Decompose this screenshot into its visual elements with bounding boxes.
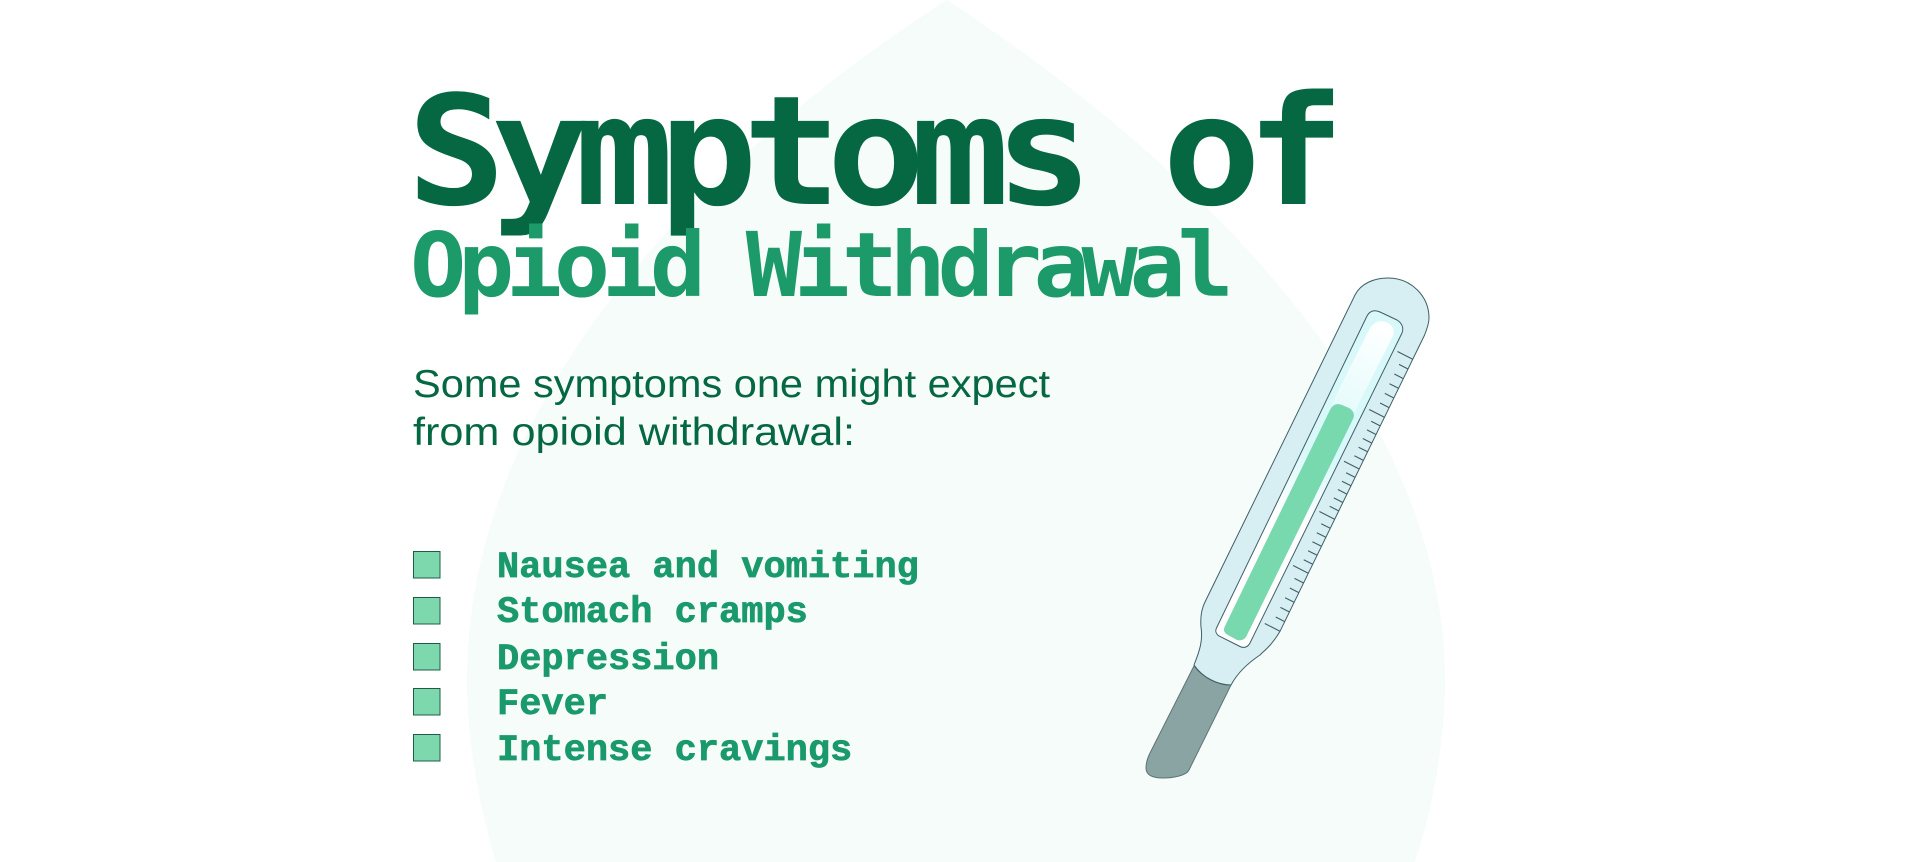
thermometer body (1194, 278, 1429, 685)
thermometer green fill level (1224, 404, 1354, 640)
title line 1: Symptoms of (407, 64, 1333, 241)
list item: intense cravings: Intense cravings (497, 730, 852, 772)
intro line 2: from opioid withdrawal: (413, 411, 855, 454)
background droplet shape (467, 0, 1445, 862)
intro paragraph (413, 363, 1050, 454)
symptom list (414, 547, 919, 772)
intro line 1: Some symptoms one might expect (413, 363, 1050, 406)
list item: stomach cramps: Stomach cramps (497, 592, 808, 634)
list item: depression: Depression (497, 639, 719, 681)
icon: thermometer (1146, 278, 1429, 778)
list item: fever (414, 684, 608, 726)
list item: nausea: Nausea and vomiting (497, 547, 919, 589)
list item: fever: Fever (497, 684, 608, 726)
thermometer grey handle (1146, 666, 1231, 778)
thermometer highlight (1331, 321, 1394, 415)
thermometer scale ticks (1265, 352, 1413, 631)
thermometer window (1216, 311, 1403, 647)
title line 2: Opioid Withdrawal (410, 213, 1228, 317)
title (407, 64, 1333, 317)
